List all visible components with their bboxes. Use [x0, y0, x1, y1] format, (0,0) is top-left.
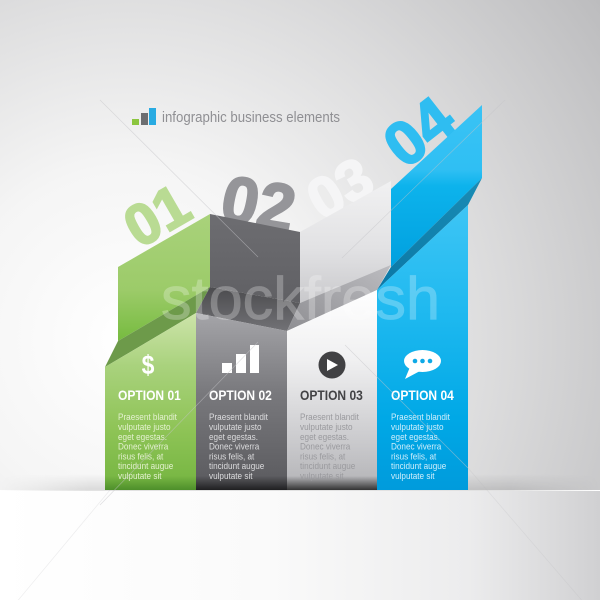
option 01 text: risus felis, at [118, 451, 164, 462]
lower white column [287, 290, 377, 490]
icon: speech bubble [404, 350, 441, 379]
option 02 text: Praesent blandit [209, 411, 268, 422]
icon: bar chart [222, 345, 259, 373]
option 04 text: vulputate justo [391, 421, 444, 432]
option 04 text: eget egestas. [391, 431, 440, 442]
green fold band [105, 287, 210, 367]
lower gray column [196, 313, 287, 490]
watermark lines [100, 100, 505, 505]
upper blue fold [391, 105, 482, 267]
option 02 text: tincidunt augue [209, 460, 264, 471]
option 03 text: Praesent blandit [300, 411, 359, 422]
upper green fold [118, 214, 210, 341]
option 03 text: tincidunt augue [300, 460, 355, 471]
option 03 text: Donec viverra [300, 441, 350, 452]
option 01 heading: OPTION 01 [118, 387, 181, 403]
white fold band [287, 265, 391, 331]
option 03 text: vulputate sit [300, 470, 344, 481]
panel: option 03 [287, 181, 391, 490]
option 02 text: vulputate sit [209, 470, 253, 481]
option 01 text: vulputate justo [118, 421, 171, 432]
option 02 text: vulputate justo [209, 421, 262, 432]
panel: option 02 [196, 214, 300, 490]
option 01 text: Praesent blandit [118, 411, 177, 422]
option 03 text: eget egestas. [300, 431, 349, 442]
option 04 text: vulputate sit [391, 470, 435, 481]
gray fold band [196, 287, 300, 331]
icon: dollar: $ [142, 350, 154, 380]
upper gray fold [210, 214, 300, 303]
option 01 text: tincidunt augue [118, 460, 173, 471]
option 04 text: risus felis, at [391, 451, 437, 462]
option 03 text: vulputate justo [300, 421, 353, 432]
option 03 text: risus felis, at [300, 451, 346, 462]
icon: play button [318, 352, 346, 378]
blue fold band [377, 178, 482, 290]
option 02 text: risus felis, at [209, 451, 255, 462]
number 03: 03 [296, 145, 384, 233]
number 02: 02 [215, 161, 302, 246]
option 02 heading: OPTION 02 [209, 387, 272, 403]
number 01: 01 [113, 172, 201, 260]
option 01 text: eget egestas. [118, 431, 167, 442]
lower green column [105, 313, 196, 490]
wall shadow above floor [26, 478, 574, 491]
title: infographic business elements [162, 109, 340, 126]
option 04 text: tincidunt augue [391, 460, 446, 471]
icon: title bars [132, 108, 156, 125]
watermark: stockfresh [161, 265, 440, 332]
option 04 text: Donec viverra [391, 441, 441, 452]
option 01 text: Donec viverra [118, 441, 168, 452]
panel: option 01 [105, 214, 210, 490]
option 02 text: Donec viverra [209, 441, 259, 452]
floor [0, 491, 600, 600]
option 03 heading: OPTION 03 [300, 387, 363, 403]
panel: option 04 [377, 105, 482, 490]
lower blue column [377, 205, 468, 490]
number 04: 04 [371, 84, 468, 181]
option 04 heading: OPTION 04 [391, 387, 455, 403]
option 04 text: Praesent blandit [391, 411, 450, 422]
option 01 text: vulputate sit [118, 470, 162, 481]
option 02 text: eget egestas. [209, 431, 258, 442]
upper white fold [300, 181, 391, 303]
